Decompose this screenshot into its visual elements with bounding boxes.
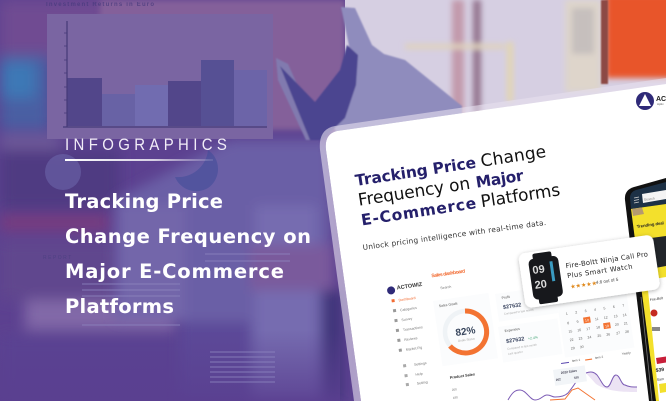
collar and tee (276, 7, 462, 140)
main title: Change Frequency on (65, 225, 311, 248)
top caption: Investment Returns in Euro (46, 2, 154, 8)
product sales chart: 200 (452, 387, 457, 392)
dashboard sidebar menu (391, 296, 431, 388)
calendar: 12 (604, 316, 608, 320)
product popup: Plus Smart Watch (567, 263, 633, 280)
phone mockup: $39 (655, 367, 665, 374)
dashboard sidebar menu: Transactions (403, 325, 423, 332)
dashboard sidebar menu: Help (415, 372, 423, 377)
calendar: 21 (624, 321, 628, 326)
dashboard sidebar menu: Categories (400, 306, 417, 312)
dashboard sidebar menu: Survey (401, 317, 413, 322)
calendar: 26 (606, 332, 610, 337)
product sales chart: 202 (556, 377, 561, 382)
calendar: 16 (577, 328, 582, 333)
revenue stats cards: $27632 (503, 302, 522, 311)
dashboard: Search (440, 285, 452, 290)
calendar: 29 (571, 346, 575, 351)
calendar: 5 (603, 306, 606, 311)
main title: Tracking Price (65, 190, 223, 213)
phone mockup (625, 178, 666, 401)
rating stars: ★★★★★ (570, 280, 597, 291)
calendar: 3 (584, 309, 587, 313)
phone mockup: Search (644, 196, 655, 202)
logo top right: AC (656, 96, 666, 103)
card heading (354, 141, 562, 230)
calendar: 2 (575, 310, 578, 315)
card heading: Frequency on (357, 174, 471, 211)
sales goals panel (433, 293, 498, 366)
calendar: 13 (613, 314, 618, 319)
dashboard (386, 269, 637, 400)
report document overlay (43, 150, 290, 382)
revenue stats cards: Compared to last month (504, 308, 534, 316)
revenue stats cards: Compared to last month (507, 343, 538, 351)
sales goals panel: Sales Goals (439, 301, 458, 308)
calendar: 7 (622, 304, 625, 308)
calendar: 18 (596, 325, 600, 330)
label: report: REPORT (43, 255, 73, 261)
calendar: 24 (587, 335, 592, 340)
calendar: 25 (597, 334, 602, 338)
card heading: Tracking Price (354, 154, 477, 190)
dashboard sidebar menu: Market Fig (406, 346, 423, 352)
main title: Major E-Commerce (65, 260, 284, 283)
sales goals panel: Goals Status (458, 336, 476, 343)
phone mockup: Fire-Bolt (650, 296, 663, 302)
revenue stats cards: Expenses (504, 327, 520, 333)
dashboard sidebar menu: Reviews (404, 336, 418, 342)
dashboard title: Sales dashboard (431, 269, 466, 279)
calendar: 9 (576, 320, 579, 324)
calendar: 6 (613, 305, 615, 309)
background right side (345, 0, 666, 140)
revenue stats cards: +2.4% (528, 335, 538, 341)
pie chart right (175, 150, 218, 191)
product sales chart (450, 351, 637, 400)
sales goals panel: 82% (455, 325, 476, 339)
product sales chart: 330 (574, 375, 579, 380)
calendar: 10 (585, 318, 589, 323)
revenue stats cards: Last quarter (508, 350, 523, 356)
calendar: 8 (567, 321, 569, 325)
calendar: 17 (586, 327, 590, 331)
calendar: 20 (615, 322, 619, 327)
bar chart panel (47, 14, 273, 139)
calendar: 15 (568, 329, 573, 334)
calendar: 1 (566, 312, 568, 316)
calendar: 14 (622, 313, 627, 317)
dashboard sidebar menu: Settings (414, 361, 427, 367)
watch icon: 20 (534, 278, 548, 292)
main title: Platforms (65, 295, 174, 318)
product popup (518, 234, 661, 308)
jacket body (115, 140, 342, 401)
card heading: Major (475, 167, 525, 192)
bars (67, 60, 267, 126)
card heading: Change (479, 142, 548, 172)
revenue stats cards: $27632 (506, 336, 525, 345)
revenue stats cards (495, 285, 563, 363)
product popup: 4.6 out of 5 (596, 277, 619, 285)
heading underline (65, 159, 213, 161)
phone mockup: Trending deal (636, 220, 664, 229)
calendar: 28 (625, 330, 629, 334)
calendar: 23 (578, 336, 583, 341)
white report card (320, 78, 666, 401)
chart legend: Item 1 (572, 358, 581, 363)
calendar: 19 (605, 324, 609, 328)
product sales chart: Item 2 (595, 355, 604, 360)
watch icon: 09 (532, 263, 546, 277)
card heading: Platforms (479, 180, 562, 212)
card heading: E-Commerce (360, 194, 477, 229)
product sales chart: 180 (453, 395, 458, 400)
phone mockup: Sam (657, 377, 664, 382)
chart tooltip (553, 365, 587, 386)
pie chart left (45, 154, 81, 190)
donut chart (445, 311, 487, 353)
logo top right: Aptiv (657, 102, 664, 106)
heading label: infographics: INFOGRAPHICS (65, 136, 227, 154)
calendar: 4 (594, 308, 596, 312)
calendar (556, 288, 634, 358)
dashboard sidebar menu: Dashboard (398, 296, 416, 302)
calendar: 27 (616, 331, 620, 335)
calendar: 22 (569, 338, 574, 342)
bottom fade (0, 330, 340, 401)
product sales chart: Product Sales (450, 372, 475, 380)
logo top right (636, 92, 666, 110)
dashboard sidebar menu: Setting (417, 380, 428, 386)
revenue stats cards: Profit (501, 295, 510, 300)
dashboard logo: ACTOWIZ (396, 282, 423, 292)
product sales chart: Yearly (622, 351, 631, 356)
product sales chart: 2022 Sales (561, 369, 578, 375)
neck and skin (100, 0, 345, 130)
watch icon (527, 250, 564, 305)
calendar: 11 (595, 317, 599, 321)
product name: Fire-Boltt Ninja Call Pro (565, 250, 648, 270)
card subtitle: Unlock pricing intelligence with real-time data. (362, 218, 547, 252)
calendar: 30 (580, 345, 584, 349)
